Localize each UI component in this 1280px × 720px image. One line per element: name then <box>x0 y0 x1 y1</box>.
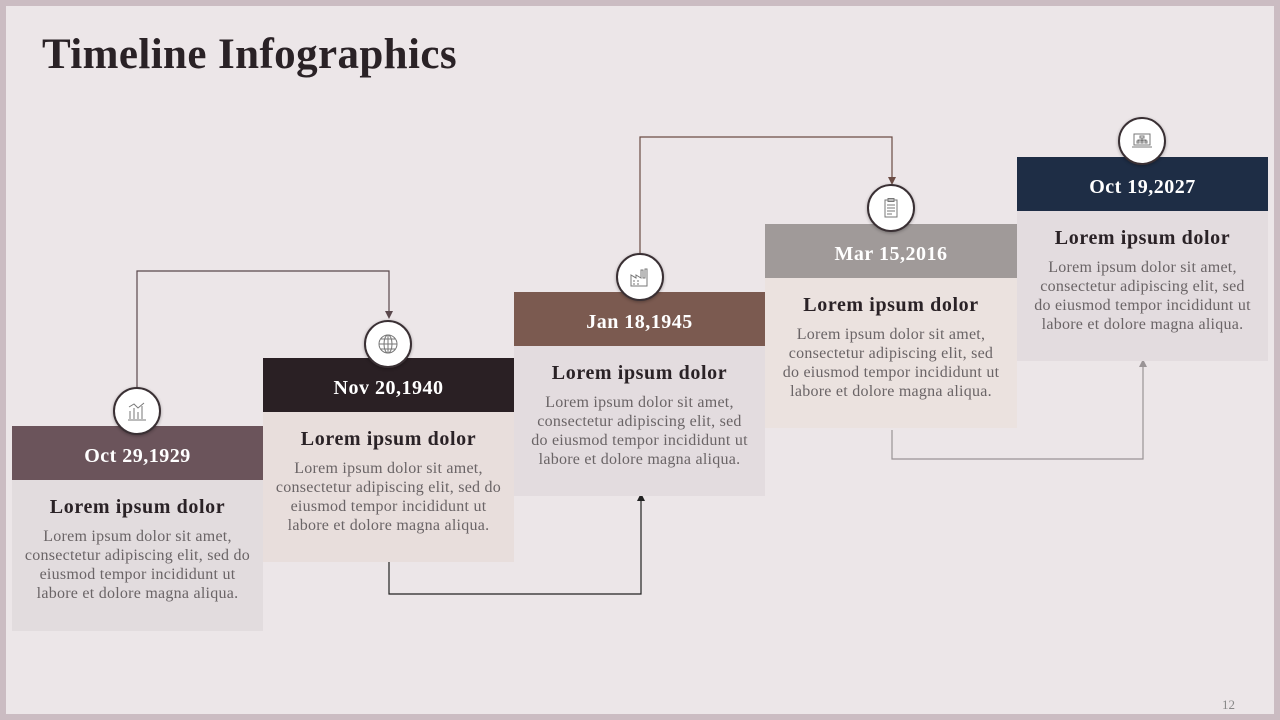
card 2: consectetur adipiscing elit, sed do <box>276 479 501 496</box>
card 2: Lorem ipsum dolor <box>301 428 476 450</box>
card 5: do eiusmod tempor incididunt ut <box>1034 297 1251 314</box>
card 5 <box>1017 157 1268 361</box>
card 1: eiusmod tempor incididunt ut <box>40 566 235 583</box>
card 4 <box>765 224 1017 428</box>
card 1: Lorem ipsum dolor sit amet, <box>43 528 232 545</box>
icon: factory <box>616 253 664 301</box>
card 4: consectetur adipiscing elit, sed <box>789 345 993 362</box>
card 3: Jan 18,1945 <box>586 311 693 333</box>
card 3: do eiusmod tempor incididunt ut <box>531 432 748 449</box>
card 4: labore et dolore magna aliqua. <box>790 383 992 400</box>
card 4: Lorem ipsum dolor <box>803 294 979 316</box>
card 3 <box>514 292 765 496</box>
card 5: Lorem ipsum dolor sit amet, <box>1048 259 1237 276</box>
card 3: Lorem ipsum dolor sit amet, <box>545 394 734 411</box>
icon: laptop <box>1118 117 1166 165</box>
title: Timeline Infographics <box>42 31 457 78</box>
page number: 12 <box>1222 697 1235 712</box>
card 2: Nov 20,1940 <box>334 377 443 399</box>
card 5: Lorem ipsum dolor <box>1055 227 1230 249</box>
card 3: Lorem ipsum dolor <box>552 362 727 384</box>
card 1: Oct 29,1929 <box>84 445 191 467</box>
card 1: labore et dolore magna aliqua. <box>37 585 238 602</box>
card 2: Lorem ipsum dolor sit amet, <box>294 460 483 477</box>
card 2: eiusmod tempor incididunt ut <box>291 498 486 515</box>
card 2 <box>263 358 514 562</box>
card 5: consectetur adipiscing elit, sed <box>1040 278 1245 295</box>
card 1: consectetur adipiscing elit, sed do <box>25 547 250 564</box>
card 3: labore et dolore magna aliqua. <box>539 451 740 468</box>
card 1: Lorem ipsum dolor <box>50 496 225 518</box>
card 3: consectetur adipiscing elit, sed <box>537 413 742 430</box>
icon: globe <box>364 320 412 368</box>
icon: clipboard <box>867 184 915 232</box>
card 1 <box>12 426 263 631</box>
card 4: Lorem ipsum dolor sit amet, <box>797 326 985 343</box>
card 4: Mar 15,2016 <box>835 243 947 265</box>
card 5: Oct 19,2027 <box>1089 176 1196 198</box>
card 2: labore et dolore magna aliqua. <box>288 517 489 534</box>
card 4: do eiusmod tempor incididunt ut <box>783 364 999 381</box>
card 5: labore et dolore magna aliqua. <box>1042 316 1243 333</box>
icon: chart <box>113 387 161 435</box>
